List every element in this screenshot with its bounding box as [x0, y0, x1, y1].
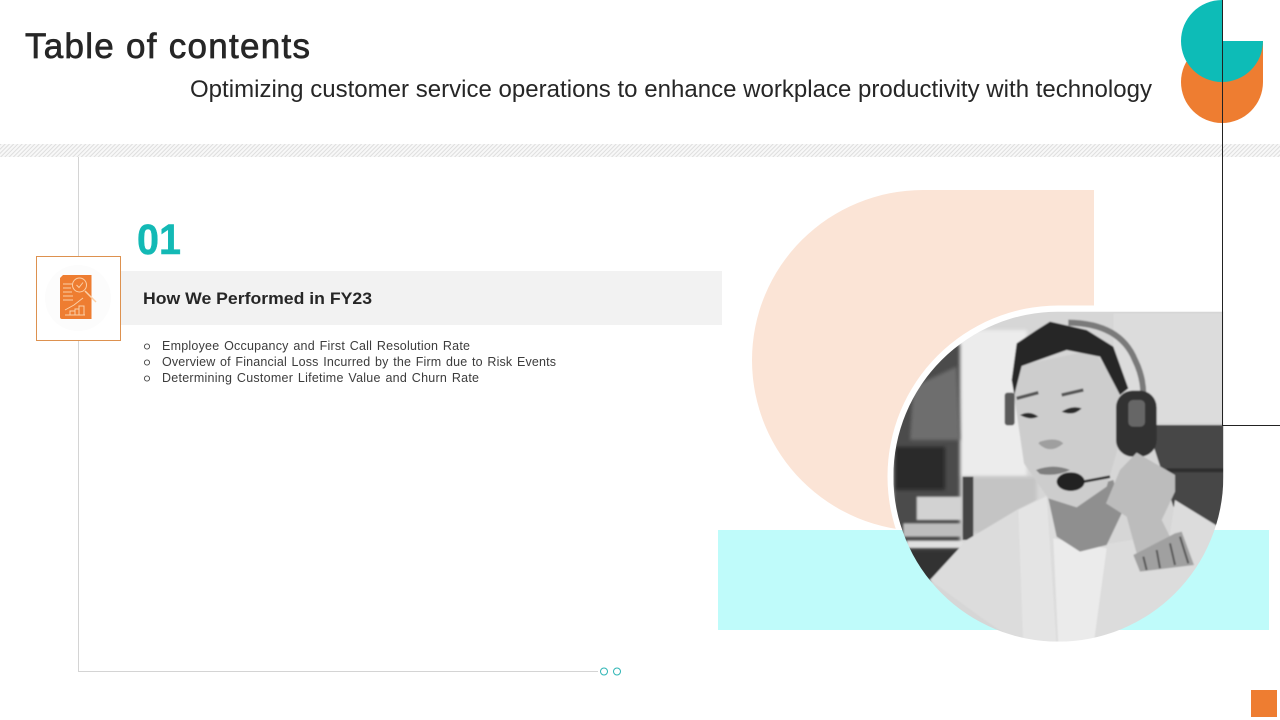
wristwatch	[1133, 532, 1194, 572]
eyes	[1020, 407, 1082, 418]
left frame line with end circles	[78, 157, 620, 675]
icon: report with magnifier	[36, 256, 120, 340]
photo white ring	[888, 306, 1230, 648]
eyebrows	[1017, 390, 1083, 398]
bullet 1: Employee Occupancy and First Call Resolution Rate	[162, 339, 470, 353]
face	[1014, 350, 1121, 507]
section heading bar: How We Performed in FY23	[143, 289, 372, 308]
shirt	[930, 499, 1216, 584]
orange corner square	[1251, 690, 1277, 717]
decorative teal and orange shapes with connector line	[1181, 0, 1280, 426]
bullet 2: Overview of Financial Loss Incurred by the Firm due to Risk Events	[162, 355, 556, 369]
bullet 3: Determining Customer Lifetime Value and Churn Rate	[162, 371, 479, 385]
teal shape	[1181, 0, 1263, 82]
neck	[1048, 480, 1122, 552]
peach rounded shape	[752, 190, 1094, 531]
headband	[1068, 323, 1143, 395]
subtitle: Optimizing customer service operations to enhance workplace productivity with technology	[190, 76, 1152, 103]
section number: 01	[137, 216, 181, 264]
shirt shading	[1018, 497, 1057, 647]
orange shape	[1181, 41, 1263, 123]
hand	[1106, 453, 1175, 553]
hair	[1012, 322, 1128, 395]
cyan rectangle	[718, 530, 1269, 630]
ear cup highlight	[1128, 400, 1145, 427]
photo: support agent with headset	[880, 300, 1227, 647]
nose	[1038, 440, 1063, 449]
microphone	[1057, 472, 1110, 491]
section heading bar	[121, 271, 722, 325]
right ear cup	[1116, 391, 1157, 457]
mouth	[1036, 467, 1070, 475]
left ear cup	[1005, 393, 1015, 425]
hatched divider band	[0, 144, 1280, 157]
title: Table of contents	[25, 27, 310, 66]
connector line	[1222, 0, 1280, 426]
bullet list	[144, 339, 556, 385]
undershirt	[1053, 538, 1107, 647]
photo contents	[880, 300, 1227, 647]
photo background	[893, 312, 1224, 632]
